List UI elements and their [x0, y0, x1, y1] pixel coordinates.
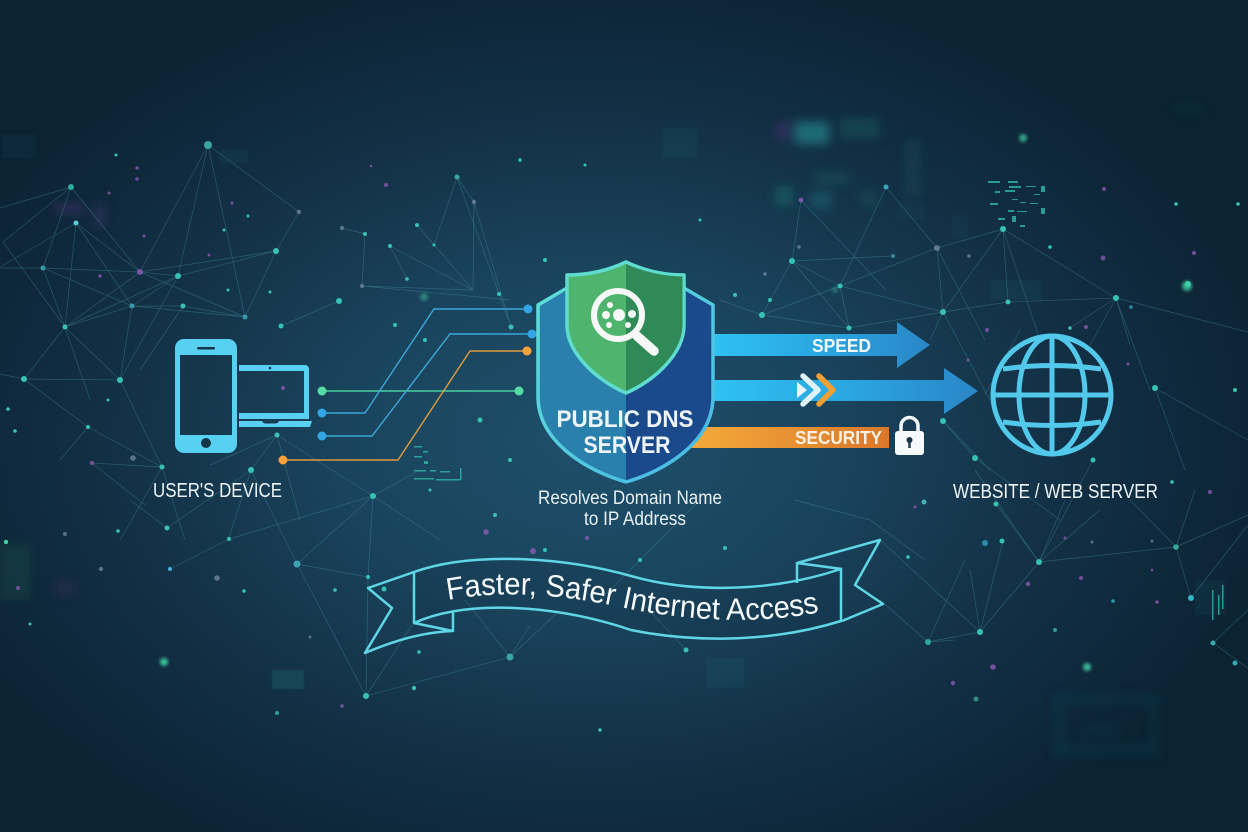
outer shield	[538, 262, 713, 482]
connection lines from device to DNS	[278, 304, 536, 464]
arrow: security: SECURITY	[795, 427, 883, 448]
background network nodes	[4, 134, 1240, 732]
icon: padlock	[895, 418, 924, 455]
icon: laptop	[239, 365, 312, 427]
icon: globe	[993, 336, 1111, 454]
background blurred data blocks	[0, 105, 1225, 758]
label: user's device: USER'S DEVICE	[153, 480, 282, 502]
green inner shield	[567, 262, 684, 393]
left node: user's device	[153, 339, 312, 502]
icon: smartphone	[175, 339, 237, 453]
ribbon outline	[365, 540, 883, 653]
ribbon banner	[364, 538, 884, 654]
caption: resolves domain name to IP address: Resolves Domain Name	[538, 488, 722, 509]
heading: public dns server: SERVER	[584, 432, 670, 459]
label: website / web server: WEBSITE / WEB SERVER	[953, 481, 1158, 503]
arrow: speed	[700, 322, 930, 368]
heading: public dns server	[556, 406, 694, 459]
arrows: speed, flow, security	[680, 322, 978, 455]
right node: website / web server	[953, 336, 1158, 503]
glowing accents	[160, 134, 1192, 671]
purple and grey nodes	[16, 165, 1212, 708]
arrow: security	[680, 427, 889, 448]
glitch code fragments	[414, 181, 1224, 620]
background network lines	[0, 145, 1248, 696]
caption: resolves domain name to IP address: to IP Address	[584, 509, 686, 530]
heading: public dns server: PUBLIC DNS	[556, 406, 694, 433]
arrow: main flow	[700, 368, 978, 414]
arrow: speed: SPEED	[812, 335, 871, 356]
icon: magnifying glass with nodes	[594, 291, 654, 351]
caption: resolves domain name to IP address	[538, 488, 722, 530]
large teal nodes	[4, 141, 1240, 732]
central shield: public DNS server	[538, 262, 713, 482]
ribbon text: Faster, Safer Internet Access	[446, 574, 818, 620]
